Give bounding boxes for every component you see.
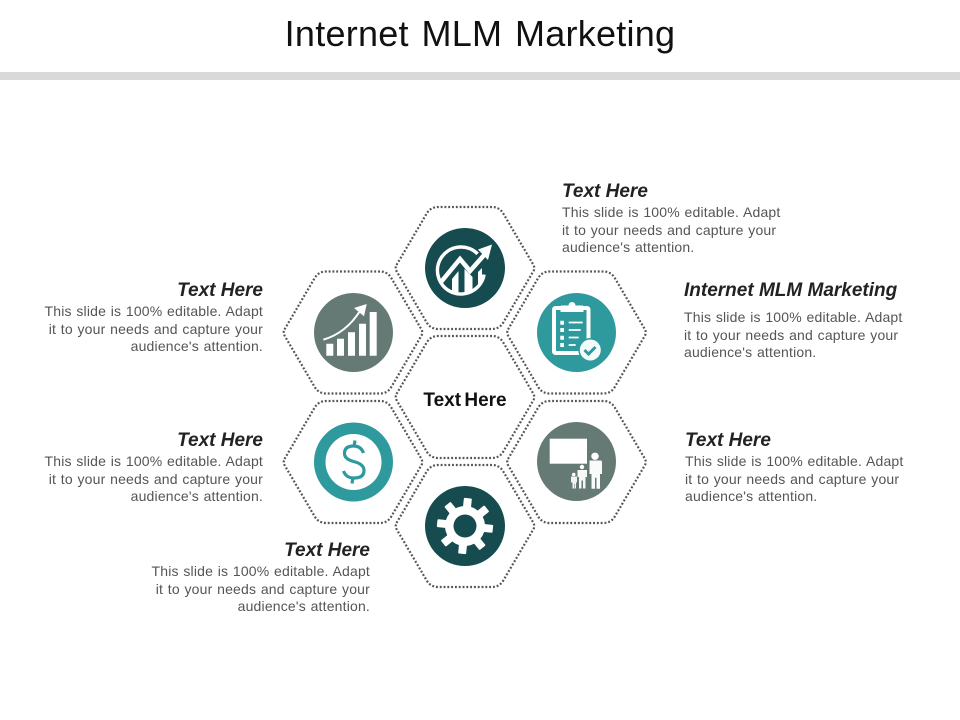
center label: Text Here — [423, 390, 507, 411]
title: Internet MLM Marketing — [285, 13, 675, 54]
text block: bottom — [152, 540, 370, 614]
text block: lower right: it to your needs and capture your — [685, 471, 899, 487]
hexagon: upper right — [507, 272, 646, 394]
text block: internet mlm marketing: it to your needs and capture your — [684, 327, 898, 343]
text block: top: Text Here — [562, 181, 648, 202]
text block: bottom: Text Here — [284, 540, 370, 561]
text block: top — [562, 181, 780, 255]
text block: lower right — [685, 430, 904, 504]
text block: lower left — [44, 430, 263, 504]
hexagon: upper left — [284, 272, 422, 394]
text block: lower left: Text Here — [177, 430, 263, 451]
icon: presentation with people — [537, 422, 616, 501]
text block: bottom: it to your needs and capture your — [156, 581, 370, 597]
hexagon: lower left — [284, 401, 422, 523]
hexagon: bottom — [396, 465, 534, 587]
text block: lower right: This slide is 100% editable. Adapt — [685, 453, 903, 469]
hexagon: lower right — [507, 401, 646, 523]
text block: internet mlm marketing: Internet MLM Marketing — [684, 280, 897, 301]
text block: lower left: it to your needs and capture your — [49, 471, 263, 487]
text block: upper left: it to your needs and capture your — [49, 321, 263, 337]
text block: top: audience's attention. — [562, 239, 694, 255]
text block: bottom: audience's attention. — [238, 598, 370, 614]
icon: bar chart with arrow — [314, 293, 393, 372]
text block: upper left: audience's attention. — [131, 338, 263, 354]
text block: lower left: audience's attention. — [131, 488, 263, 504]
icon: rising chart in ring — [425, 228, 505, 308]
text block: bottom: This slide is 100% editable. Adapt — [152, 563, 370, 579]
text block: lower right: audience's attention. — [685, 488, 817, 504]
icon: gear — [425, 486, 505, 566]
text block: top: This slide is 100% editable. Adapt — [562, 204, 780, 220]
text block: internet mlm marketing: This slide is 100% editable. Adapt — [684, 309, 902, 325]
hexagon: center — [396, 336, 534, 458]
icon: dollar coin — [314, 422, 393, 502]
icon: clipboard checklist — [537, 293, 616, 372]
text block: lower left: This slide is 100% editable. Adapt — [45, 453, 263, 469]
text block: top: it to your needs and capture your — [562, 222, 776, 238]
text block: lower right: Text Here — [685, 430, 771, 451]
title rule — [0, 72, 960, 80]
text block: upper left: This slide is 100% editable. Adapt — [45, 303, 263, 319]
text block: internet mlm marketing — [684, 280, 902, 360]
text block: internet mlm marketing: audience's attention. — [684, 344, 816, 360]
text block: upper left: Text Here — [177, 280, 263, 301]
text block: upper left — [44, 280, 263, 354]
hexagon: top — [396, 207, 534, 329]
